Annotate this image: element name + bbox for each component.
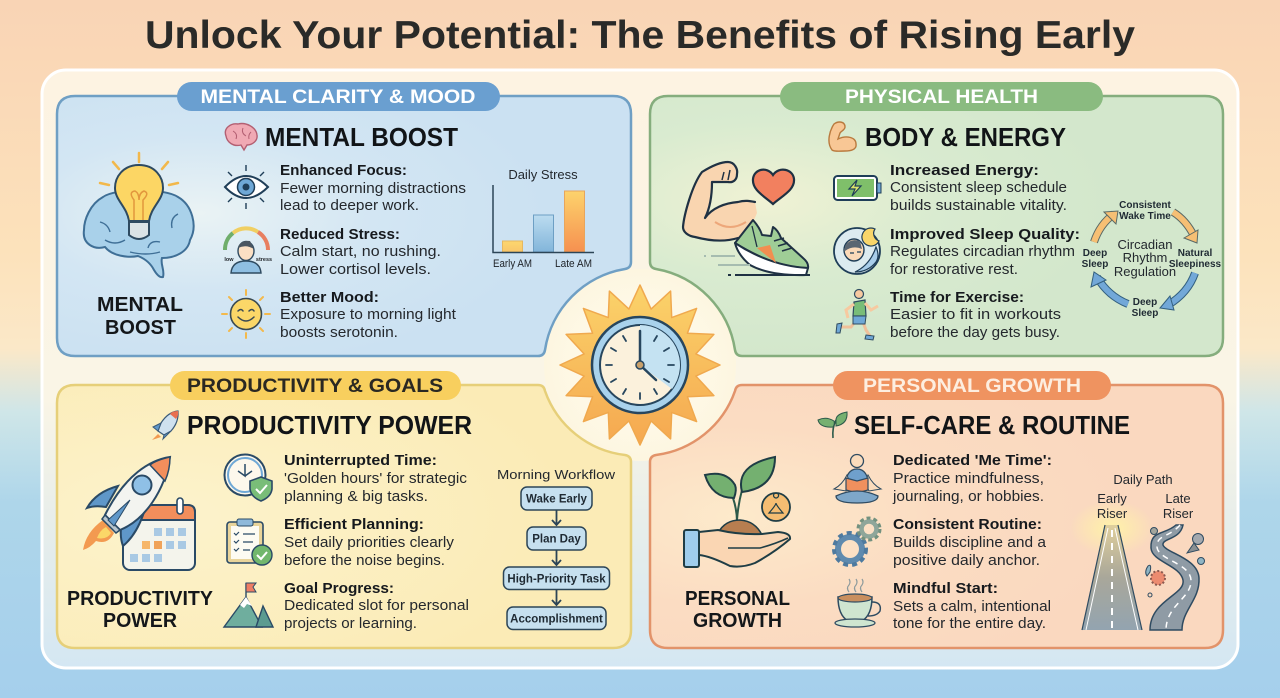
section tab: MENTAL CLARITY & MOOD — [200, 87, 476, 108]
text: enhanced focus: lead to deeper work. — [280, 198, 419, 214]
bar chart: daily stress: Daily Stress — [508, 167, 578, 182]
diagram: circadian rhythm cycle: Rhythm — [1123, 250, 1167, 265]
heading: MENTAL BOOST — [265, 122, 458, 152]
text: reduced stress: Calm start, no rushing. — [280, 244, 441, 260]
text: enhanced focus: Fewer morning distractions — [280, 181, 466, 197]
illustration caption: MENTAL — [97, 294, 183, 316]
flowchart: morning workflow: Accomplishment — [510, 614, 603, 626]
text: better mood: boosts serotonin. — [280, 325, 398, 341]
title: Unlock Your Potential: The Benefits of Rising Early — [145, 14, 1135, 57]
diagram: circadian rhythm cycle: Circadian — [1118, 237, 1172, 252]
text: dedicated me time: Practice mindfulness, — [893, 471, 1044, 487]
flowchart: morning workflow — [497, 467, 616, 630]
section tab — [177, 82, 500, 111]
flowchart: morning workflow: High-Priority Task — [507, 574, 606, 586]
text: efficient planning: Set daily priorities clearly — [284, 535, 455, 551]
illustration: plant in hand — [684, 457, 790, 567]
illustration: daily path roads: Riser — [1097, 506, 1128, 521]
diagram: circadian rhythm cycle: Deep — [1083, 248, 1107, 259]
diagram: circadian rhythm cycle: Sleepiness — [1169, 259, 1222, 270]
text: uninterrupted time: 'Golden hours' for strategic — [284, 471, 467, 487]
section tab: PRODUCTIVITY & GOALS — [187, 376, 443, 397]
text: increased energy: Consistent sleep schedule — [890, 180, 1067, 196]
text: efficient planning: Efficient Planning: — [284, 516, 424, 533]
text: uninterrupted time — [284, 452, 467, 505]
text: improved sleep quality — [890, 226, 1080, 278]
icon: stress gauge: low — [224, 257, 234, 263]
diagram: circadian rhythm cycle: Regulation — [1114, 264, 1176, 279]
text: goal progress: Dedicated slot for personal — [284, 598, 469, 614]
heading: SELF-CARE & ROUTINE — [854, 410, 1130, 440]
section tab: PHYSICAL HEALTH — [845, 87, 1038, 108]
illustration caption — [685, 588, 790, 632]
text: dedicated me time: journaling, or hobbies. — [892, 489, 1044, 505]
diagram: circadian rhythm cycle: Wake Time — [1119, 211, 1171, 222]
text: goal progress: Goal Progress: — [284, 580, 394, 597]
illustration caption: BOOST — [105, 317, 176, 339]
icon: sleeping face — [834, 228, 880, 274]
icon: small brain — [225, 124, 257, 150]
icon: eye — [225, 165, 268, 209]
diagram: circadian rhythm cycle: Sleep — [1132, 308, 1158, 319]
heading: BODY & ENERGY — [865, 122, 1066, 152]
icon: stress gauge: stress — [256, 257, 272, 263]
illustration: daily path roads: Late — [1165, 491, 1191, 506]
bar chart: daily stress: Late AM — [555, 258, 592, 270]
text: time for exercise: Easier to fit in workouts — [890, 307, 1061, 323]
illustration caption: PERSONAL — [685, 588, 790, 610]
icon: stress gauge — [224, 228, 272, 273]
text: increased energy: builds sustainable vitality. — [890, 198, 1067, 214]
text: consistent routine — [893, 516, 1047, 569]
text: uninterrupted time: Uninterrupted Time: — [284, 452, 437, 469]
text: uninterrupted time: planning & big tasks. — [284, 489, 428, 505]
diagram: circadian rhythm cycle: Deep — [1133, 297, 1157, 308]
center glow — [544, 269, 736, 461]
illustration: daily path roads: Daily Path — [1113, 472, 1173, 487]
flowchart: morning workflow: Morning Workflow — [497, 467, 616, 482]
text: time for exercise: Time for Exercise: — [890, 289, 1024, 306]
illustration: daily path roads: Riser — [1163, 506, 1194, 521]
icon: runner — [836, 290, 878, 340]
text: better mood — [280, 289, 456, 341]
text: enhanced focus — [280, 162, 466, 214]
text: improved sleep quality: Improved Sleep Quality: — [890, 226, 1080, 243]
illustration: arm, heart and shoe — [683, 162, 810, 275]
panel: mental clarity and mood — [57, 82, 631, 356]
section tab — [780, 82, 1103, 111]
text: goal progress: projects or learning. — [284, 616, 417, 632]
illustration: daily path roads: Early — [1097, 491, 1127, 506]
diagram: circadian rhythm cycle: Sleep — [1082, 259, 1108, 270]
text: consistent routine: Consistent Routine: — [893, 516, 1042, 533]
text: reduced stress — [280, 226, 441, 278]
illustration: rocket and calendar — [83, 457, 195, 570]
icon: small arm — [829, 122, 856, 151]
diagram: circadian rhythm cycle: Natural — [1178, 248, 1212, 259]
text: efficient planning: before the noise begins. — [284, 553, 445, 569]
text: mindful start: Sets a calm, intentional — [893, 599, 1051, 615]
text: consistent routine: Builds discipline and a — [893, 535, 1047, 551]
illustration caption — [67, 588, 214, 632]
text: time for exercise: before the day gets busy. — [890, 325, 1060, 341]
icon: checklist clipboard — [227, 519, 272, 565]
icon: mountain with flag — [224, 583, 273, 627]
section tab: PERSONAL GROWTH — [863, 376, 1081, 397]
text: time for exercise — [890, 289, 1061, 341]
icon: battery — [834, 176, 881, 200]
diagram: circadian rhythm cycle — [1082, 200, 1222, 319]
text: reduced stress: Reduced Stress: — [280, 226, 400, 243]
illustration: brain and light bulb — [84, 153, 194, 277]
text: increased energy: Increased Energy: — [890, 162, 1039, 179]
icon: small rocket — [152, 411, 178, 440]
text: dedicated me time: Dedicated 'Me Time': — [893, 452, 1052, 469]
text: mindful start — [893, 580, 1051, 632]
icon: meditating reader — [834, 454, 881, 503]
illustration caption — [97, 294, 183, 339]
illustration caption: PRODUCTIVITY — [67, 588, 214, 610]
bar chart: daily stress — [493, 167, 594, 270]
text: better mood: Better Mood: — [280, 289, 379, 306]
icon: smiling sun — [222, 290, 270, 338]
diagram: circadian rhythm cycle: Consistent — [1119, 200, 1172, 211]
text: goal progress — [284, 580, 469, 632]
icon: gears — [834, 518, 880, 565]
section tab — [833, 371, 1111, 400]
text: better mood: Exposure to morning light — [280, 307, 456, 323]
text: mindful start: tone for the entire day. — [893, 616, 1046, 632]
center icon: sun and clock — [560, 285, 720, 445]
text: efficient planning — [284, 516, 455, 569]
illustration: daily path roads — [1070, 472, 1204, 630]
text: consistent routine: positive daily anchor. — [893, 553, 1040, 569]
text: dedicated me time — [892, 452, 1052, 505]
text: increased energy — [890, 162, 1067, 214]
flowchart: morning workflow: Plan Day — [532, 534, 581, 546]
panel: productivity and goals — [57, 371, 631, 648]
icon: clock and shield — [224, 454, 272, 501]
text: reduced stress: Lower cortisol levels. — [280, 262, 431, 278]
icon: small sprout — [818, 412, 847, 438]
text: improved sleep quality: Regulates circadian rhythm — [890, 244, 1075, 260]
text: improved sleep quality: for restorative rest. — [890, 262, 1018, 278]
panel: physical health — [650, 82, 1223, 356]
text: enhanced focus: Enhanced Focus: — [280, 162, 407, 179]
bar chart: daily stress: Early AM — [493, 258, 532, 270]
icon: tea cup — [835, 579, 880, 627]
heading: PRODUCTIVITY POWER — [187, 410, 472, 440]
panel: personal growth — [650, 371, 1223, 648]
text: mindful start: Mindful Start: — [893, 580, 998, 597]
illustration caption: GROWTH — [693, 610, 782, 632]
illustration caption: POWER — [103, 610, 178, 632]
section tab — [170, 371, 461, 400]
flowchart: morning workflow: Wake Early — [526, 494, 588, 506]
